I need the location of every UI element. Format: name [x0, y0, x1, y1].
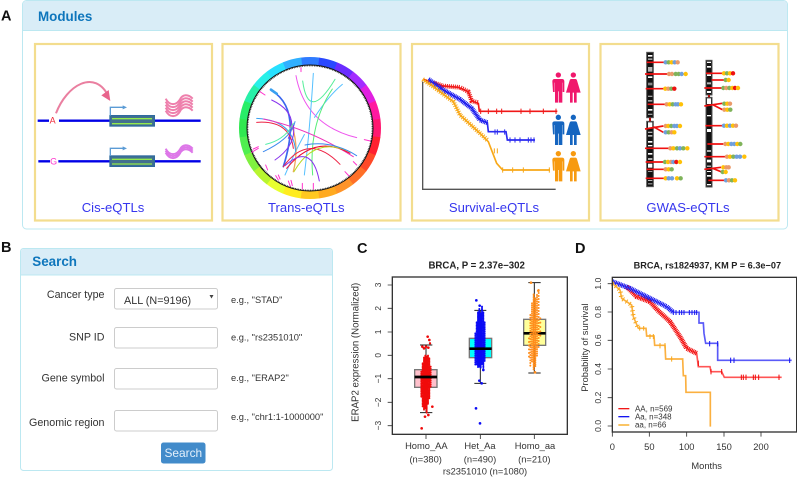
heading: search: Search	[32, 254, 77, 269]
label: Survival-eQTLs: Survival-eQTLs	[449, 200, 540, 215]
field: cancer type: ALL (N=9196)	[124, 295, 191, 307]
field: gene symbol: Gene symbol	[42, 373, 104, 385]
y axis: ERAP2 expression (Normalized)	[350, 283, 361, 422]
field: gene symbol	[42, 368, 289, 389]
x axis	[405, 434, 556, 476]
x axis: (n=380)	[409, 454, 442, 464]
panel: search form	[20, 248, 332, 470]
field: genomic region	[29, 410, 323, 431]
KM legend: aa, n=66	[635, 421, 667, 430]
y axis: Probability of survival	[580, 304, 590, 392]
x axis: rs2351010 (n=1080)	[443, 466, 527, 476]
x axis: 0	[610, 442, 615, 452]
panel letter D: D	[575, 241, 585, 257]
field: SNP ID: SNP ID	[69, 332, 105, 344]
module: trans-eQTLs	[216, 34, 404, 222]
field: cancer type: e.g., "STAD"	[231, 295, 282, 305]
cis diagram: G	[50, 156, 57, 166]
x axis: (n=490)	[464, 454, 496, 464]
y axis: 0.6	[593, 334, 603, 346]
field: SNP ID	[69, 328, 302, 348]
x axis: 100	[679, 442, 694, 452]
chromosome ideograms	[647, 52, 712, 187]
KM title: BRCA, rs1824937, KM P = 6.3e−07	[634, 260, 781, 270]
y axis: 0.2	[593, 391, 603, 404]
KM curves	[612, 282, 792, 427]
survival curve	[423, 79, 557, 189]
x axis: Homo_AA	[405, 441, 448, 451]
x axis: Het_Aa	[464, 441, 496, 451]
panel: modules	[22, 0, 788, 229]
y axis: 1	[373, 329, 383, 334]
label: Cis-eQTLs: Cis-eQTLs	[82, 200, 145, 215]
panel letter C: C	[357, 241, 368, 257]
circos ring	[216, 34, 404, 222]
search button	[161, 442, 206, 464]
field: genomic region: Genomic region	[29, 417, 105, 429]
icons: patient figures	[552, 72, 581, 181]
module: GWAS-eQTLs	[600, 44, 778, 220]
panel letter A: A	[1, 8, 12, 24]
KM legend: Aa, n=348	[635, 413, 672, 422]
x axis: (n=210)	[518, 454, 551, 464]
panel letter B: B	[1, 240, 11, 256]
panel: box plot	[350, 260, 567, 476]
search button: Search	[164, 446, 202, 460]
y axis: −1	[373, 374, 383, 383]
y axis: 2	[373, 306, 383, 311]
module: survival-eQTLs	[412, 44, 589, 220]
y axis: 3	[373, 282, 383, 287]
KM legend: AA, n=569	[635, 404, 673, 413]
x axis: 50	[644, 442, 655, 452]
y axis	[580, 277, 612, 432]
box: Homo_aa	[524, 281, 546, 374]
box: Homo_AA	[415, 335, 437, 430]
field: cancer type	[47, 288, 282, 309]
y axis: −2	[373, 397, 383, 407]
KM legend	[618, 404, 673, 430]
y axis: 0	[373, 353, 383, 358]
cis diagram: A	[50, 116, 56, 126]
y axis: 1.0	[593, 277, 603, 290]
label: Trans-eQTLs: Trans-eQTLs	[268, 200, 345, 215]
x axis	[610, 432, 769, 471]
x axis: 150	[716, 442, 732, 452]
y axis	[350, 282, 392, 430]
field: cancer type: Cancer type	[47, 289, 105, 301]
y axis: 0.0	[593, 420, 603, 432]
field: genomic region: e.g., "chr1:1-1000000"	[231, 412, 323, 422]
x axis: Months	[691, 461, 722, 471]
SNP and gene lollipops	[645, 60, 747, 183]
y axis: 0.8	[593, 306, 603, 318]
box plot title: BRCA, P = 2.37e−302	[428, 260, 525, 271]
y axis: −3	[373, 421, 383, 430]
box: Het_Aa	[469, 299, 492, 425]
heading: modules: Modules	[38, 9, 92, 24]
module: cis-eQTLs	[35, 44, 212, 220]
circos chords	[252, 68, 370, 189]
y axis: 0.4	[593, 363, 603, 375]
cis diagram	[38, 82, 201, 166]
field: SNP ID: e.g., "rs2351010"	[231, 333, 302, 343]
panel: Kaplan-Meier plot	[580, 260, 797, 471]
x axis: 200	[753, 442, 769, 452]
field: gene symbol: e.g., "ERAP2"	[231, 373, 289, 383]
plot frame	[392, 277, 567, 434]
plot frame	[612, 277, 797, 432]
x axis: Homo_aa	[515, 441, 556, 451]
label: GWAS-eQTLs: GWAS-eQTLs	[646, 200, 730, 215]
